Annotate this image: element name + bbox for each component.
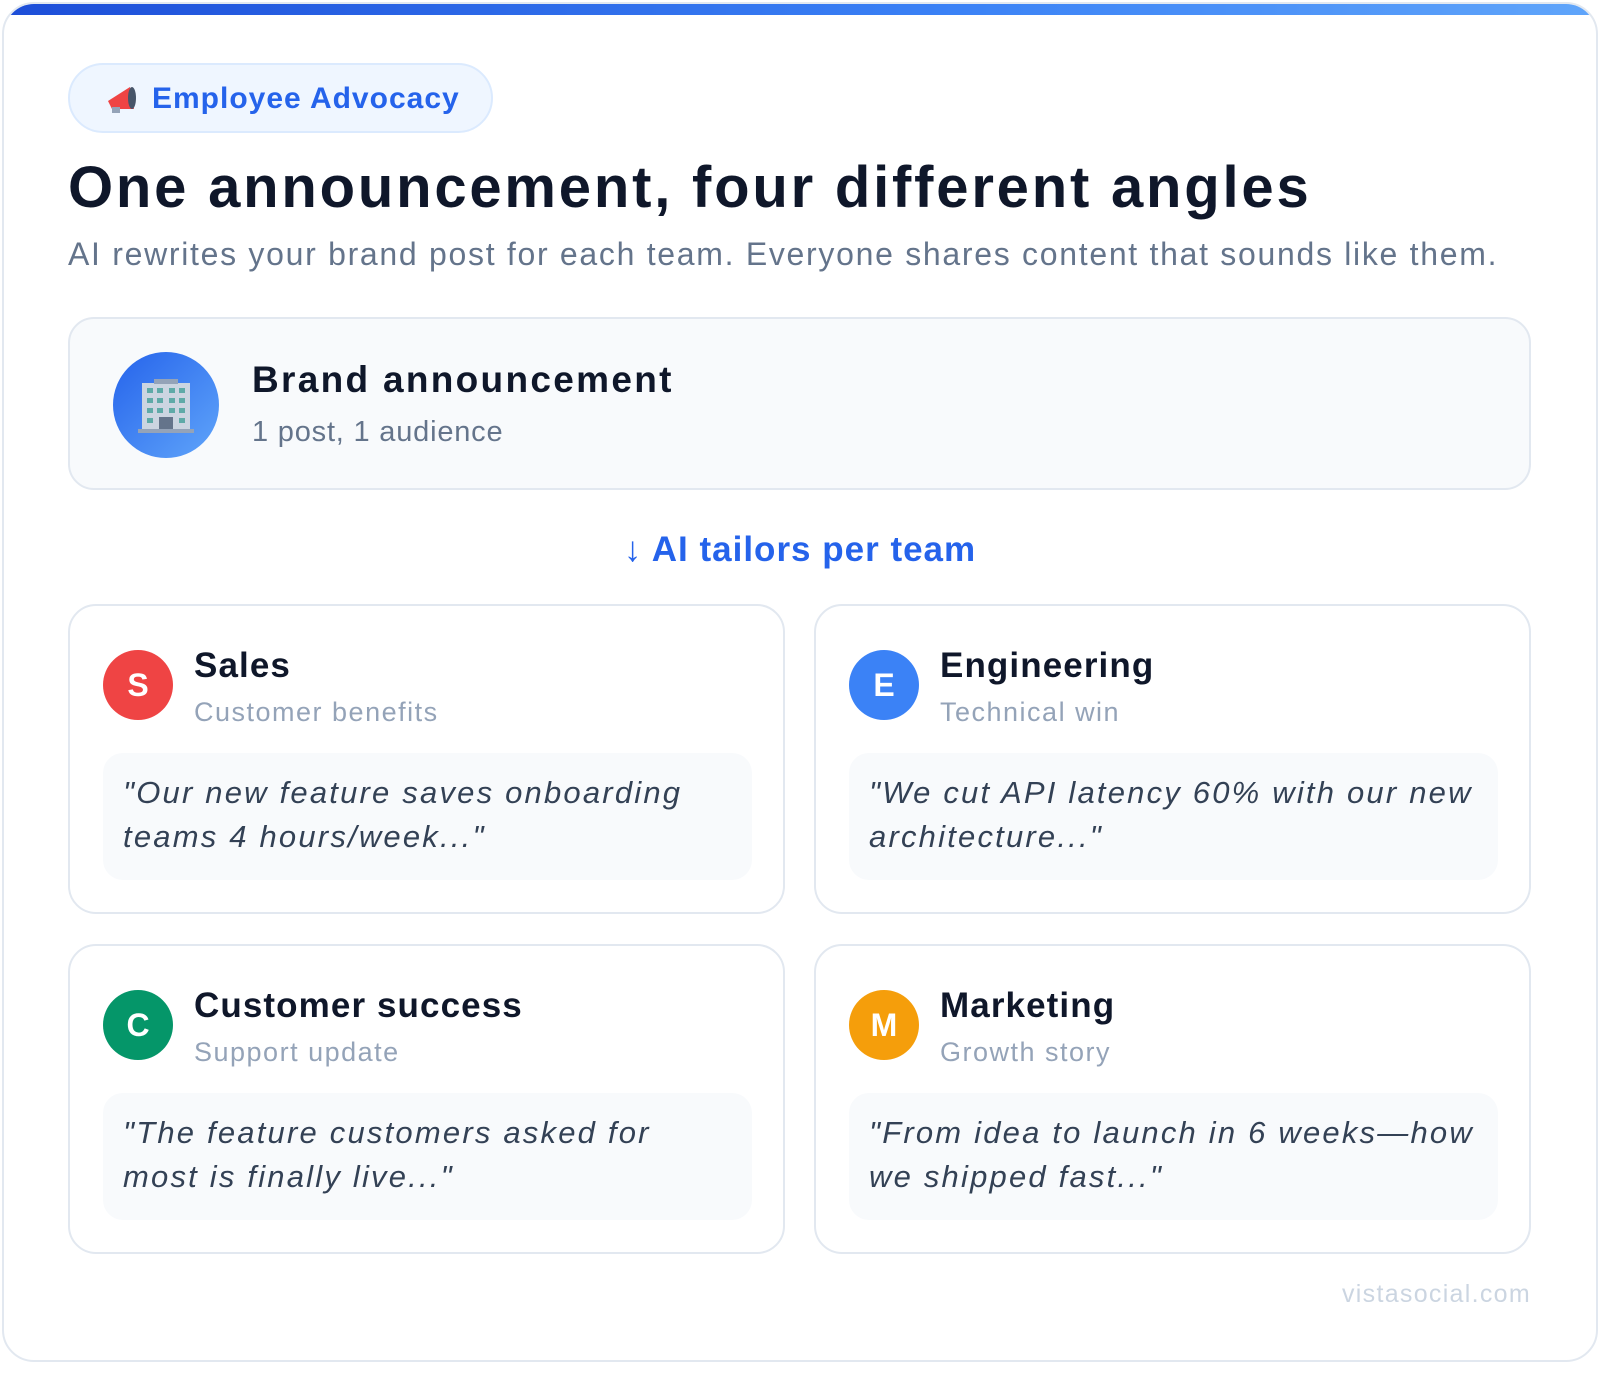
panel: sales (68, 604, 785, 914)
panel: marketing (814, 944, 1531, 1254)
brand subtitle: 1 post, 1 audience (252, 416, 503, 448)
badge: Employee Advocacy: Employee Advocacy (152, 82, 460, 115)
brand title: Brand announcement (252, 359, 674, 400)
avatar M: M (871, 1007, 897, 1043)
quote: "The feature customers asked for most is finally live..." (123, 1115, 651, 1194)
team name: Customer success (194, 986, 523, 1025)
panel: customer success (68, 944, 785, 1254)
avatar C: C (126, 1007, 150, 1043)
avatar E (849, 650, 919, 720)
avatar M (849, 990, 919, 1060)
quote (103, 1093, 752, 1220)
avatar S (103, 650, 173, 720)
panel: engineering (814, 604, 1531, 914)
avatar S: S (127, 667, 149, 703)
quote (103, 753, 752, 880)
team name: Engineering (940, 646, 1154, 685)
quote: "Our new feature saves onboarding teams 4 hours/week..." (123, 775, 682, 854)
team angle: Support update (194, 1037, 400, 1067)
quote (849, 1093, 1498, 1220)
panel: brand announcement (68, 317, 1531, 490)
arrow label: ↓ AI tailors per team (624, 530, 976, 569)
team name: Marketing (940, 986, 1115, 1025)
team angle: Technical win (940, 697, 1120, 727)
badge: Employee Advocacy (68, 63, 493, 133)
quote (849, 753, 1498, 880)
quote: "We cut API latency 60% with our new architecture..." (869, 775, 1473, 854)
title: One announcement, four different angles (68, 155, 1312, 220)
icon: megaphone (108, 87, 136, 113)
team angle: Customer benefits (194, 697, 439, 727)
subtitle: AI rewrites your brand post for each team. Everyone shares content that sounds like them. (68, 236, 1498, 272)
avatar E: E (873, 667, 895, 703)
watermark: vistasocial.com (1342, 1280, 1531, 1308)
avatar C (103, 990, 173, 1060)
icon: building (113, 352, 219, 458)
quote: "From idea to launch in 6 weeks—how we shipped fast..." (869, 1115, 1474, 1194)
team name: Sales (194, 646, 291, 685)
team angle: Growth story (940, 1037, 1111, 1067)
